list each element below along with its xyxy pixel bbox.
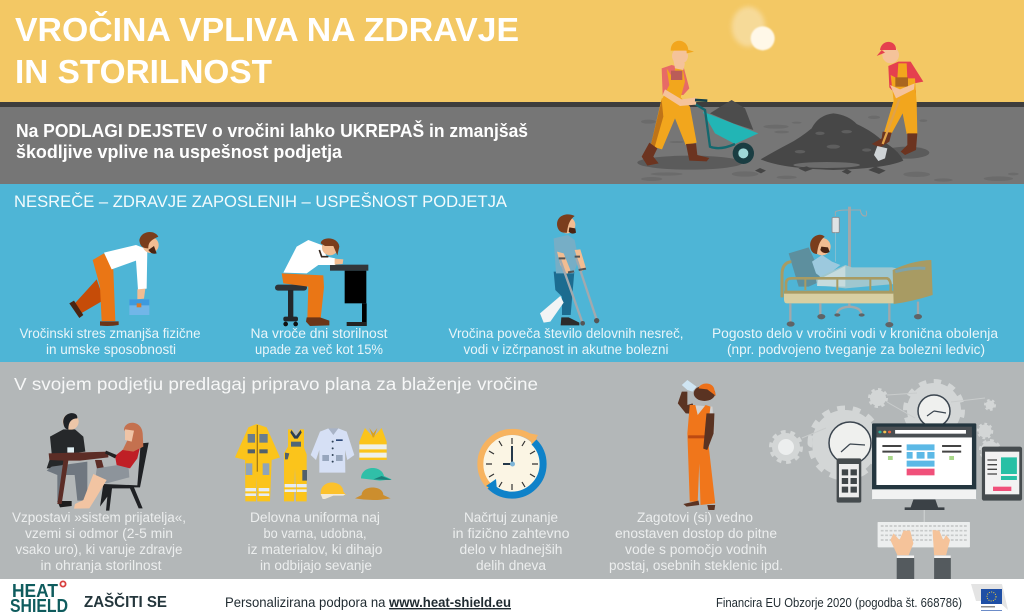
keyboard: [878, 510, 970, 547]
panel: accidents, employee health, performance: [0, 184, 1024, 362]
icon: man bending to pick up briefcase: [69, 232, 159, 326]
icon: clock with arrows: [480, 432, 543, 495]
monitor: [872, 423, 976, 510]
caption: delih dneva: [476, 558, 546, 573]
hats: [321, 468, 392, 500]
icon: injured man on crutches: [540, 214, 599, 326]
tagline: ZAŠČITI SE: [84, 593, 167, 611]
title: VROČINA VPLIVA NA ZDRAVJE: [15, 10, 519, 48]
support link: Personalizirana podpora na www.heat-shield.eu: [225, 594, 511, 610]
funding note: Financira EU Obzorje 2020 (pogodba št. 668786): [716, 596, 962, 610]
logo: Heat Shield: HEAT: [12, 581, 58, 601]
caption: Vročina poveča število delovnih nesreč,: [448, 326, 684, 341]
hands: [890, 530, 951, 579]
icon: two colleagues on a break at a table: [47, 413, 149, 511]
overalls: [284, 429, 307, 501]
caption: bo varna, udobna,: [264, 526, 366, 541]
caption: in ohranja storilnost: [40, 558, 162, 573]
caption: [452, 510, 570, 573]
caption: [248, 510, 382, 573]
caption: Delovna uniforma naj: [250, 510, 380, 525]
caption: Zagotovi (si) vedno: [637, 510, 753, 525]
caption: in odbijajo sevanje: [260, 558, 372, 573]
heading: NESREČE – ZDRAVJE ZAPOSLENIH – USPEŠNOST PODJETJA: [14, 192, 508, 211]
caption: Načrtuj zunanje: [464, 510, 558, 525]
caption: vodi v izčrpanost in akutne bolezni: [464, 342, 668, 357]
caption: [609, 510, 783, 573]
caption: (npr. podvojeno tveganje za bolezni ledvic): [727, 342, 985, 357]
icon: protective clothing: [235, 424, 392, 501]
caption: Pogosto delo v vročini vodi v kronična obolenja: [712, 326, 998, 341]
icon: exhausted man at desk: [275, 238, 368, 326]
lab coat: [311, 428, 354, 473]
caption: delo v hladnejših: [460, 542, 562, 557]
caption: in umske sposobnosti: [46, 342, 176, 357]
caption: in fizično zahtevno: [452, 526, 570, 541]
phone: [837, 458, 861, 503]
caption: Vročinski stres zmanjša fizične: [20, 326, 200, 341]
caption: postaj, osebnih steklenic ipd.: [609, 558, 783, 573]
panel: header: [0, 0, 1024, 184]
gears: [772, 383, 999, 476]
subtitle: Na PODLAGI DEJSTEV o vročini lahko UKREPAŠ in zmanjšaš: [16, 120, 528, 141]
icon: sun: [732, 7, 775, 50]
panel: footer: [0, 579, 1024, 614]
title: [15, 10, 519, 90]
coverall: [235, 424, 280, 501]
dirt pile: [755, 113, 903, 174]
vest: [359, 428, 387, 460]
subtitle: [16, 120, 528, 162]
ground patches: [637, 116, 1019, 182]
worker with shovel: [872, 42, 923, 161]
icon: patient in hospital bed: [782, 207, 933, 327]
caption: upade za več kot 15%: [255, 342, 383, 357]
worker with wheelbarrow: [642, 41, 758, 166]
logo: Heat Shield: [10, 581, 68, 614]
tablet: [982, 447, 1022, 501]
caption: iz materialov, ki dihajo: [248, 542, 382, 557]
title: IN STORILNOST: [15, 53, 272, 90]
wall clocks: [829, 395, 950, 464]
caption: Na vroče dni storilnost: [250, 326, 388, 341]
caption: Vzpostavi »sistem prijatelja«,: [12, 510, 186, 525]
caption: vsako uro), ki varuje zdravje: [16, 542, 182, 557]
heading: V svojem podjetju predlagaj pripravo plana za blaženje vročine: [14, 374, 538, 394]
caption: enostaven dostop do pitne: [615, 526, 777, 541]
caption: [12, 510, 186, 573]
panel: heat mitigation plan: [0, 362, 1024, 579]
icon: worker drinking water: [678, 380, 716, 510]
logo: European Commission: [971, 584, 1008, 611]
caption: vzemi si odmor (2-5 min: [25, 526, 173, 541]
caption: vode s pomočjo vodnih: [625, 542, 767, 557]
icon: computer, gears, devices and typing hands: [772, 383, 1022, 579]
illustration: workers with wheelbarrow and dirt pile: [637, 7, 1019, 182]
subtitle: škodljive vplive na uspešnost podjetja: [16, 142, 343, 162]
